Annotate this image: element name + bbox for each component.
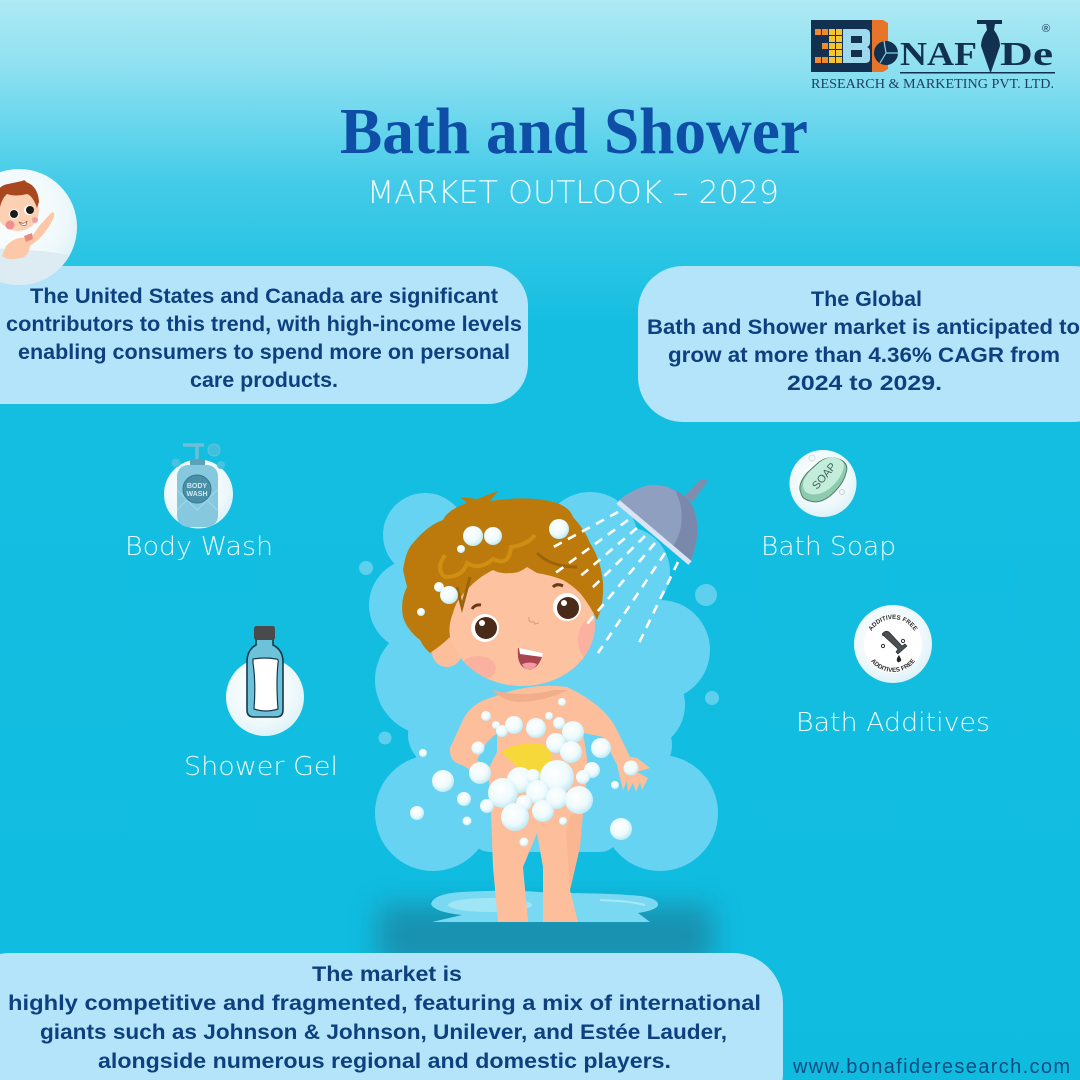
growth text: 2024 to 2029. — [787, 371, 942, 395]
floor shadow — [378, 905, 713, 967]
competition text — [8, 962, 761, 1073]
icon: bath soap — [790, 450, 856, 517]
icon: body wash: BODY — [187, 483, 207, 490]
child body — [450, 686, 650, 922]
label: body wash: Body Wash — [125, 532, 273, 562]
panel: global growth — [638, 266, 1080, 422]
title: Bath and Shower — [340, 95, 808, 168]
panel: regional trend — [0, 266, 528, 404]
competition text: giants such as Johnson & Johnson, Unilever, and Estée Lauder, — [40, 1020, 727, 1044]
cheeks — [464, 620, 595, 678]
arm gap — [477, 733, 497, 768]
growth text — [647, 287, 1080, 395]
icon: bath additives — [854, 605, 932, 683]
foam cloud — [369, 492, 718, 871]
logo tagline: RESEARCH & MARKETING PVT. LTD. — [811, 77, 1054, 92]
competition text: highly competitive and fragmented, featuring a mix of international — [8, 991, 761, 1015]
hair — [402, 491, 603, 653]
illustration: child in shower — [359, 480, 719, 967]
shower head — [617, 480, 708, 563]
regional trend text: contributors to this trend, with high-income levels — [6, 312, 522, 336]
soap bubbles — [410, 519, 638, 846]
logo mark — [811, 20, 888, 72]
competition text: alongside numerous regional and domestic players. — [98, 1049, 671, 1073]
sponge — [501, 743, 552, 784]
pale dots — [359, 561, 719, 744]
icon: bath additives: ADDITIVES FREE — [869, 614, 918, 631]
eyes — [471, 614, 499, 642]
icon: shower gel — [226, 626, 304, 736]
subtitle: MARKET OUTLOOK – 2029 — [367, 175, 779, 211]
competition text: The market is — [312, 962, 462, 986]
icon: baby in bubble — [0, 169, 80, 288]
puddle — [431, 891, 658, 922]
website: www.bonafideresearch.com — [792, 1056, 1070, 1078]
regional trend text: care products. — [190, 368, 338, 392]
label: bath additives: Bath Additives — [796, 708, 990, 738]
mouth — [518, 648, 543, 670]
panel: competition — [0, 953, 783, 1080]
head — [402, 491, 603, 686]
logo underline — [900, 72, 1055, 74]
label: bath soap: Bath Soap — [761, 532, 896, 562]
logo — [811, 20, 1055, 92]
shower water — [548, 512, 678, 653]
icon: bath additives: ADDITIVES FREE — [870, 658, 915, 672]
regional trend text — [6, 284, 522, 392]
regional trend text: The United States and Canada are significant — [30, 284, 498, 308]
logo pen nib — [977, 20, 1002, 72]
label: shower gel: Shower Gel — [184, 752, 338, 782]
growth text: grow at more than 4.36% CAGR from — [668, 343, 1060, 367]
icon: bath soap: SOAP — [810, 461, 839, 492]
logo wordmark right: De — [1000, 36, 1053, 73]
growth text: The Global — [811, 287, 922, 311]
icon: body wash: WASH — [186, 491, 208, 498]
growth text: Bath and Shower market is anticipated to — [647, 315, 1080, 339]
logo wordmark left: NAF — [900, 36, 977, 73]
registered mark: ® — [1042, 23, 1050, 35]
icon: body wash — [164, 444, 233, 528]
regional trend text: enabling consumers to spend more on personal — [18, 340, 510, 364]
logo pie letter — [874, 41, 898, 65]
